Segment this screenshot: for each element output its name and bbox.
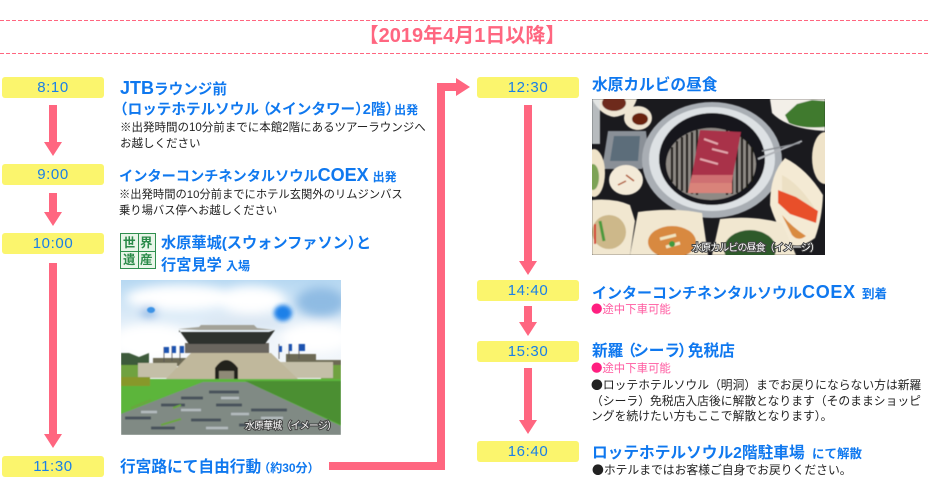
time: 14:40 — [477, 280, 579, 301]
time: 10:00: 10:00 — [33, 235, 73, 252]
stop heading: free time: 行宮路にて自由行動（約30分） — [120, 459, 320, 476]
time: 16:40 — [477, 441, 579, 462]
note: drop-off 1: ●途中下車可能 — [591, 301, 671, 317]
stop heading: JTB lounge: （ロッテホテルソウル（メインタワー）2階）出発 — [113, 102, 418, 118]
icon: world heritage badge — [120, 233, 156, 269]
note: Shilla dismissal — [591, 376, 921, 423]
time: 9:00 — [2, 164, 104, 185]
photo: galbi lunch: 水原カルビの昼食（イメージ） — [692, 242, 820, 254]
note: Shilla dismissal: ングを続けたい方もここで解散となります）。 — [591, 409, 832, 423]
photo: Hwaseong gate: 水原華城（イメージ） — [245, 420, 337, 432]
time: 9:00: 9:00 — [37, 166, 69, 183]
stop heading: Hwaseong Fortress: 行宮見学 入場 — [161, 257, 250, 274]
time: 8:10 — [2, 77, 104, 98]
icon: world heritage badge: 界 — [140, 236, 153, 250]
note: Shilla dismissal: ●ロッテホテルソウル（明洞）までお戻りにならない方は新羅 — [591, 376, 921, 393]
photo: galbi lunch — [592, 99, 825, 255]
note: lounge: お越しください — [120, 138, 200, 150]
time: 12:30: 12:30 — [508, 79, 548, 96]
note: limousine bus: ※出発時間の10分前までにホテル玄関外のリムジンバス — [119, 189, 403, 201]
title: 【2019年4月1日以降】 — [359, 25, 565, 47]
time: 10:00 — [2, 233, 104, 254]
icon: world heritage badge: 世 — [123, 236, 136, 250]
stop heading: Hwaseong Fortress — [161, 234, 371, 274]
note: limousine bus: 乗り場バス停へお越しください — [119, 205, 277, 217]
stop heading: JTB lounge — [113, 78, 418, 118]
note: Shilla dismissal: （シーラ）免税店入店後に解散となります（そのままショッピ — [591, 394, 921, 408]
time: 16:40: 16:40 — [508, 443, 548, 460]
time: 11:30 — [2, 456, 104, 477]
note: lounge — [120, 121, 426, 150]
stop heading: Hwaseong Fortress: 水原華城(スウォンファソン）と — [161, 235, 371, 252]
stop heading: lunch: 水原カルビの昼食 — [592, 77, 718, 94]
icon: world heritage badge: 産 — [140, 253, 153, 267]
stop heading: Shilla duty free: 新羅（シーラ）免税店 — [592, 343, 735, 360]
time: 14:40: 14:40 — [508, 282, 548, 299]
time: 11:30: 11:30 — [33, 458, 73, 475]
stop heading: InterContinental arrival: インターコンチネンタルソウルCOEX 到着 — [592, 282, 887, 302]
icon: world heritage badge: 遺 — [123, 253, 136, 267]
stop heading: JTB lounge: JTBラウンジ前 — [120, 78, 227, 98]
time: 15:30 — [477, 341, 579, 362]
note: drop-off 2: ●途中下車可能 — [591, 360, 671, 376]
note: lounge: ※出発時間の10分前までに本館2階にあるツアーラウンジへ — [120, 122, 426, 134]
stop heading: Lotte parking: ロッテホテルソウル2階駐車場 にて解散 — [592, 445, 862, 462]
photo: Hwaseong gate — [121, 280, 341, 435]
time: 8:10: 8:10 — [37, 79, 69, 96]
note: return to hotel: ●ホテルまではお客様ご自身でお戻りください。 — [592, 461, 852, 478]
time: 12:30 — [477, 77, 579, 98]
time: 15:30: 15:30 — [508, 343, 548, 360]
note: limousine bus — [119, 188, 403, 217]
stop heading: InterContinental departure: インターコンチネンタルソウルCOEX 出発 — [119, 165, 397, 185]
